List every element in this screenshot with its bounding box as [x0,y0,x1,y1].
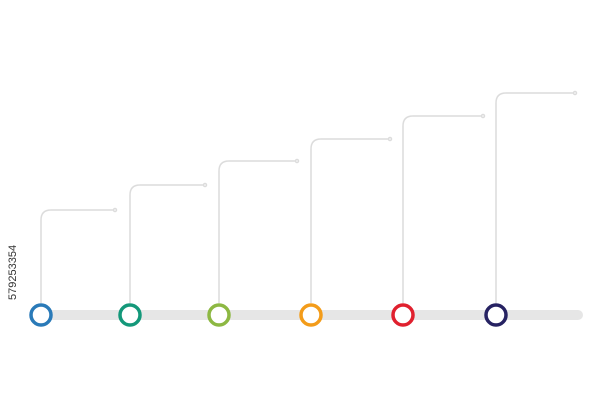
marker 3 green [209,305,229,325]
marker 4 orange [301,305,321,325]
step 2 connector [130,184,206,303]
marker 2 teal [120,305,140,325]
step 3 connector [219,160,298,303]
step 5 connector [403,114,484,303]
stock id text: 579253354 [7,245,19,300]
step 6 connector [496,92,576,303]
marker 5 red [393,305,413,325]
step 1 connector [41,208,116,303]
marker 6 navy [486,305,506,325]
marker 1 blue [31,305,51,325]
gray timeline bar [38,310,583,320]
step 4 connector [311,138,392,303]
